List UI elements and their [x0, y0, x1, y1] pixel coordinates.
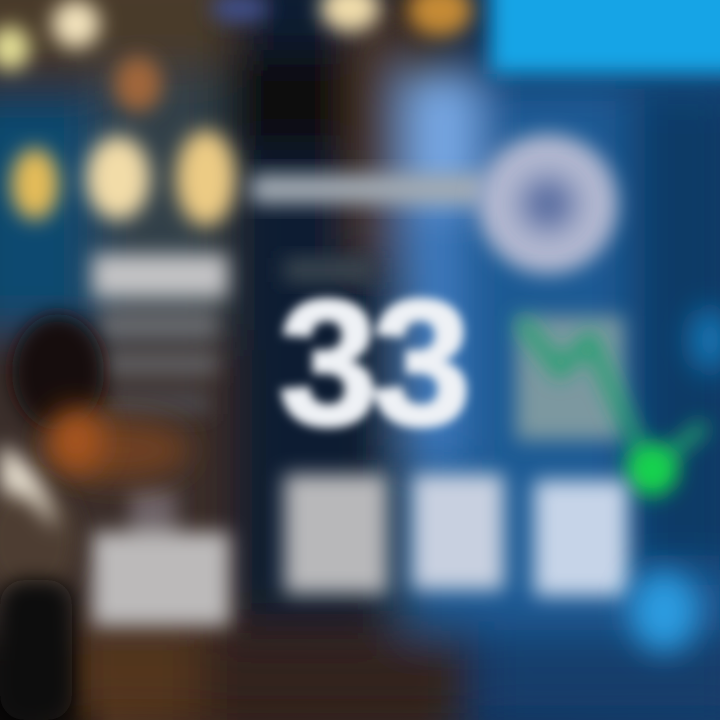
top right cyan banner [490, 0, 720, 74]
bottom right glow [630, 308, 720, 652]
ceiling lights [0, 0, 472, 226]
left text block [92, 254, 228, 414]
badge icon [478, 134, 618, 274]
small label above number [284, 258, 374, 282]
person silhouette [0, 314, 190, 720]
line chart panel [516, 272, 720, 496]
heading bar [250, 174, 485, 204]
stat cards [92, 474, 628, 626]
big number: 33 [279, 263, 465, 462]
